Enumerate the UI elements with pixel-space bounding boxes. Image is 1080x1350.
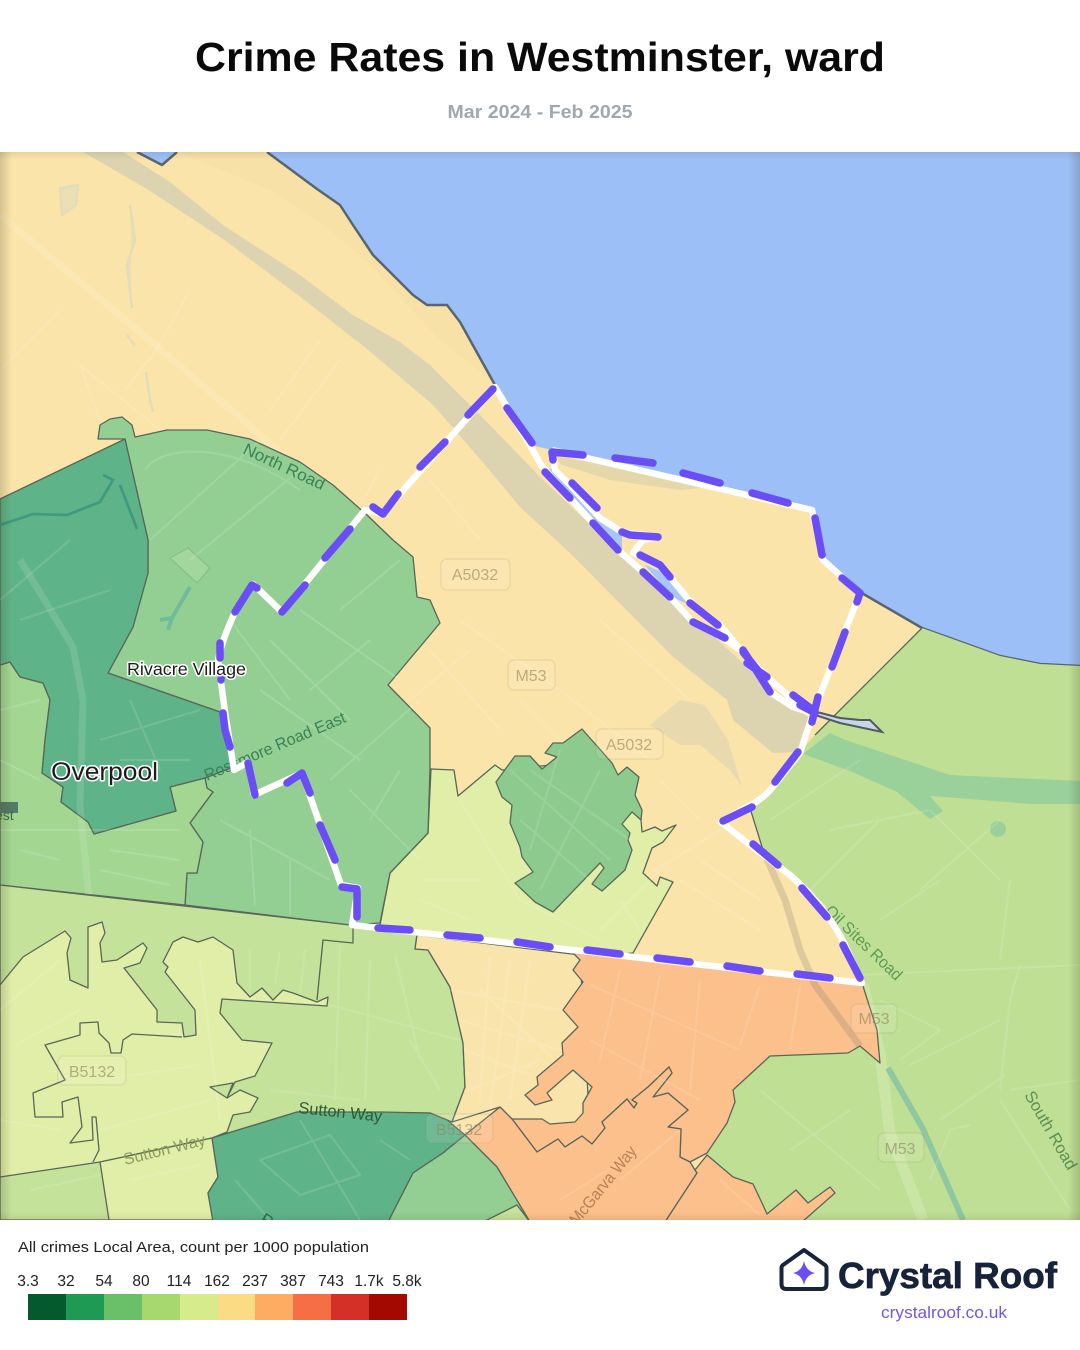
estuary tail <box>815 712 882 732</box>
sea <box>137 152 1080 666</box>
road shield M53 south-east: M53 <box>884 1141 916 1158</box>
road shield M53 east: M53 <box>858 1011 890 1028</box>
pond on east ward <box>990 821 1006 837</box>
legend tick labels: 387 <box>280 1273 306 1290</box>
legend tick labels: 5.8k <box>392 1273 422 1290</box>
road shield B5132 west: B5132 <box>69 1064 115 1081</box>
stream in west dark ward <box>0 475 137 529</box>
south-west streets <box>0 945 460 1190</box>
road label Oil Sites Road: Oil Sites Road <box>821 902 906 984</box>
east ward: green <box>665 628 1080 1220</box>
road shield A5032 south <box>596 729 663 759</box>
south centre pale ward <box>415 935 590 1130</box>
legend <box>17 1239 422 1320</box>
inner river on east ward <box>803 733 1080 819</box>
far west green area <box>0 662 213 905</box>
road label South Road: South Road <box>1021 1088 1080 1173</box>
east ward border lines <box>750 628 922 850</box>
ward boundary: white underlay <box>218 387 862 983</box>
road shield M53 centre: M53 <box>515 668 547 685</box>
road shield A5032 north <box>441 559 510 590</box>
road shield B5132 west <box>58 1056 126 1085</box>
road label McGarva Way: McGarva Way <box>566 1142 641 1229</box>
stream and pond in north-west ward <box>160 587 190 630</box>
railway on east ward <box>888 1068 963 1220</box>
central green island <box>496 729 642 912</box>
legend colour scale <box>28 1294 407 1320</box>
logo wordmark: Crystal Roof <box>838 1255 1058 1296</box>
road shield M53 east <box>851 1004 897 1033</box>
south dark green ward <box>208 1112 465 1222</box>
road shield M53 centre <box>508 660 555 690</box>
place label Overpool: Overpool <box>51 758 158 786</box>
coastline <box>137 152 1080 666</box>
road shield B5132 south: B5132 <box>436 1122 482 1139</box>
motorway corridor on east ward <box>863 985 923 1220</box>
legend tick labels: 1.7k <box>354 1273 384 1290</box>
streets on south dark ward <box>235 1120 410 1220</box>
legend tick labels: 114 <box>167 1273 192 1290</box>
legend tick labels: 237 <box>242 1273 268 1290</box>
orange ward <box>512 953 880 1162</box>
legend tick labels: 3.3 <box>17 1273 39 1290</box>
logo: Crystal Roof <box>782 1250 1058 1322</box>
road shield M53 south-east <box>878 1133 924 1162</box>
road shield A5032 south: A5032 <box>606 737 652 754</box>
subtitle: date range: Mar 2024 - Feb 2025 <box>448 101 632 122</box>
streets on north-west ward <box>145 440 420 915</box>
south-west lime ward <box>0 922 328 1177</box>
central lime ward <box>380 760 676 958</box>
road label fragment at map edge: R <box>257 1210 277 1232</box>
road label Sutton Way lower: Sutton Way <box>122 1131 208 1169</box>
legend tick labels: 54 <box>95 1273 113 1290</box>
station marker with clipped label at west edge <box>0 802 18 823</box>
legend tick labels: 32 <box>57 1273 75 1290</box>
orange ward south-east <box>665 1155 835 1222</box>
road label Rossmore Road East: Rossmore Road East <box>202 709 349 785</box>
south-west lime ward small green enclave <box>210 1083 233 1098</box>
sandbank along shore <box>556 456 702 490</box>
place label Rivacre Village: Rivacre Village <box>127 659 246 679</box>
streets on west wards <box>0 540 200 895</box>
south-west green ward <box>0 885 465 1220</box>
streets on central green island <box>510 750 630 890</box>
south lime block <box>100 1138 218 1220</box>
legend tick labels: 80 <box>132 1273 150 1290</box>
orange ward lower <box>465 1067 697 1222</box>
south-west green ward interior border <box>317 928 353 1000</box>
estuary band <box>83 152 812 753</box>
park block and pond in north-west ward <box>170 548 210 583</box>
road shield A5032 north: A5032 <box>452 567 498 584</box>
website url: crystalroof.co.uk <box>881 1304 1008 1322</box>
south small lime patch <box>483 1205 530 1222</box>
road label Sutton Way: Sutton Way <box>298 1099 384 1126</box>
north-west green ward <box>98 417 440 925</box>
grey railway through south wards <box>763 850 860 1046</box>
legend tick labels: 162 <box>204 1273 230 1290</box>
streets on pale ward <box>450 955 560 1110</box>
lime ward internal border <box>33 1022 182 1162</box>
title: Crime Rates in Westminster, ward <box>195 34 885 80</box>
south green ward <box>388 1135 530 1222</box>
road label North Road: North Road <box>240 440 328 494</box>
map edge fade <box>0 152 1080 1220</box>
streets and railway on orange ward <box>560 970 800 1215</box>
legend tick labels: 743 <box>318 1273 344 1290</box>
streets on east ward <box>760 760 1080 1210</box>
docks <box>650 700 742 787</box>
streets on central lime ward <box>420 800 660 940</box>
grey ponds and drains on western land <box>60 185 153 412</box>
legend tick labels <box>17 1273 422 1290</box>
ward boundary: purple dashes <box>220 389 860 978</box>
coastal land strip <box>177 152 493 382</box>
legend title: All crimes Local Area, count per 1000 population <box>18 1239 369 1256</box>
road shield B5132 south <box>426 1114 493 1143</box>
choropleth map <box>0 152 1080 1232</box>
icon: house with star <box>782 1250 826 1289</box>
west dark green ward <box>0 439 233 834</box>
faint coastal land roads <box>0 214 760 930</box>
tidal channels between the ward boundary banks <box>543 468 692 606</box>
